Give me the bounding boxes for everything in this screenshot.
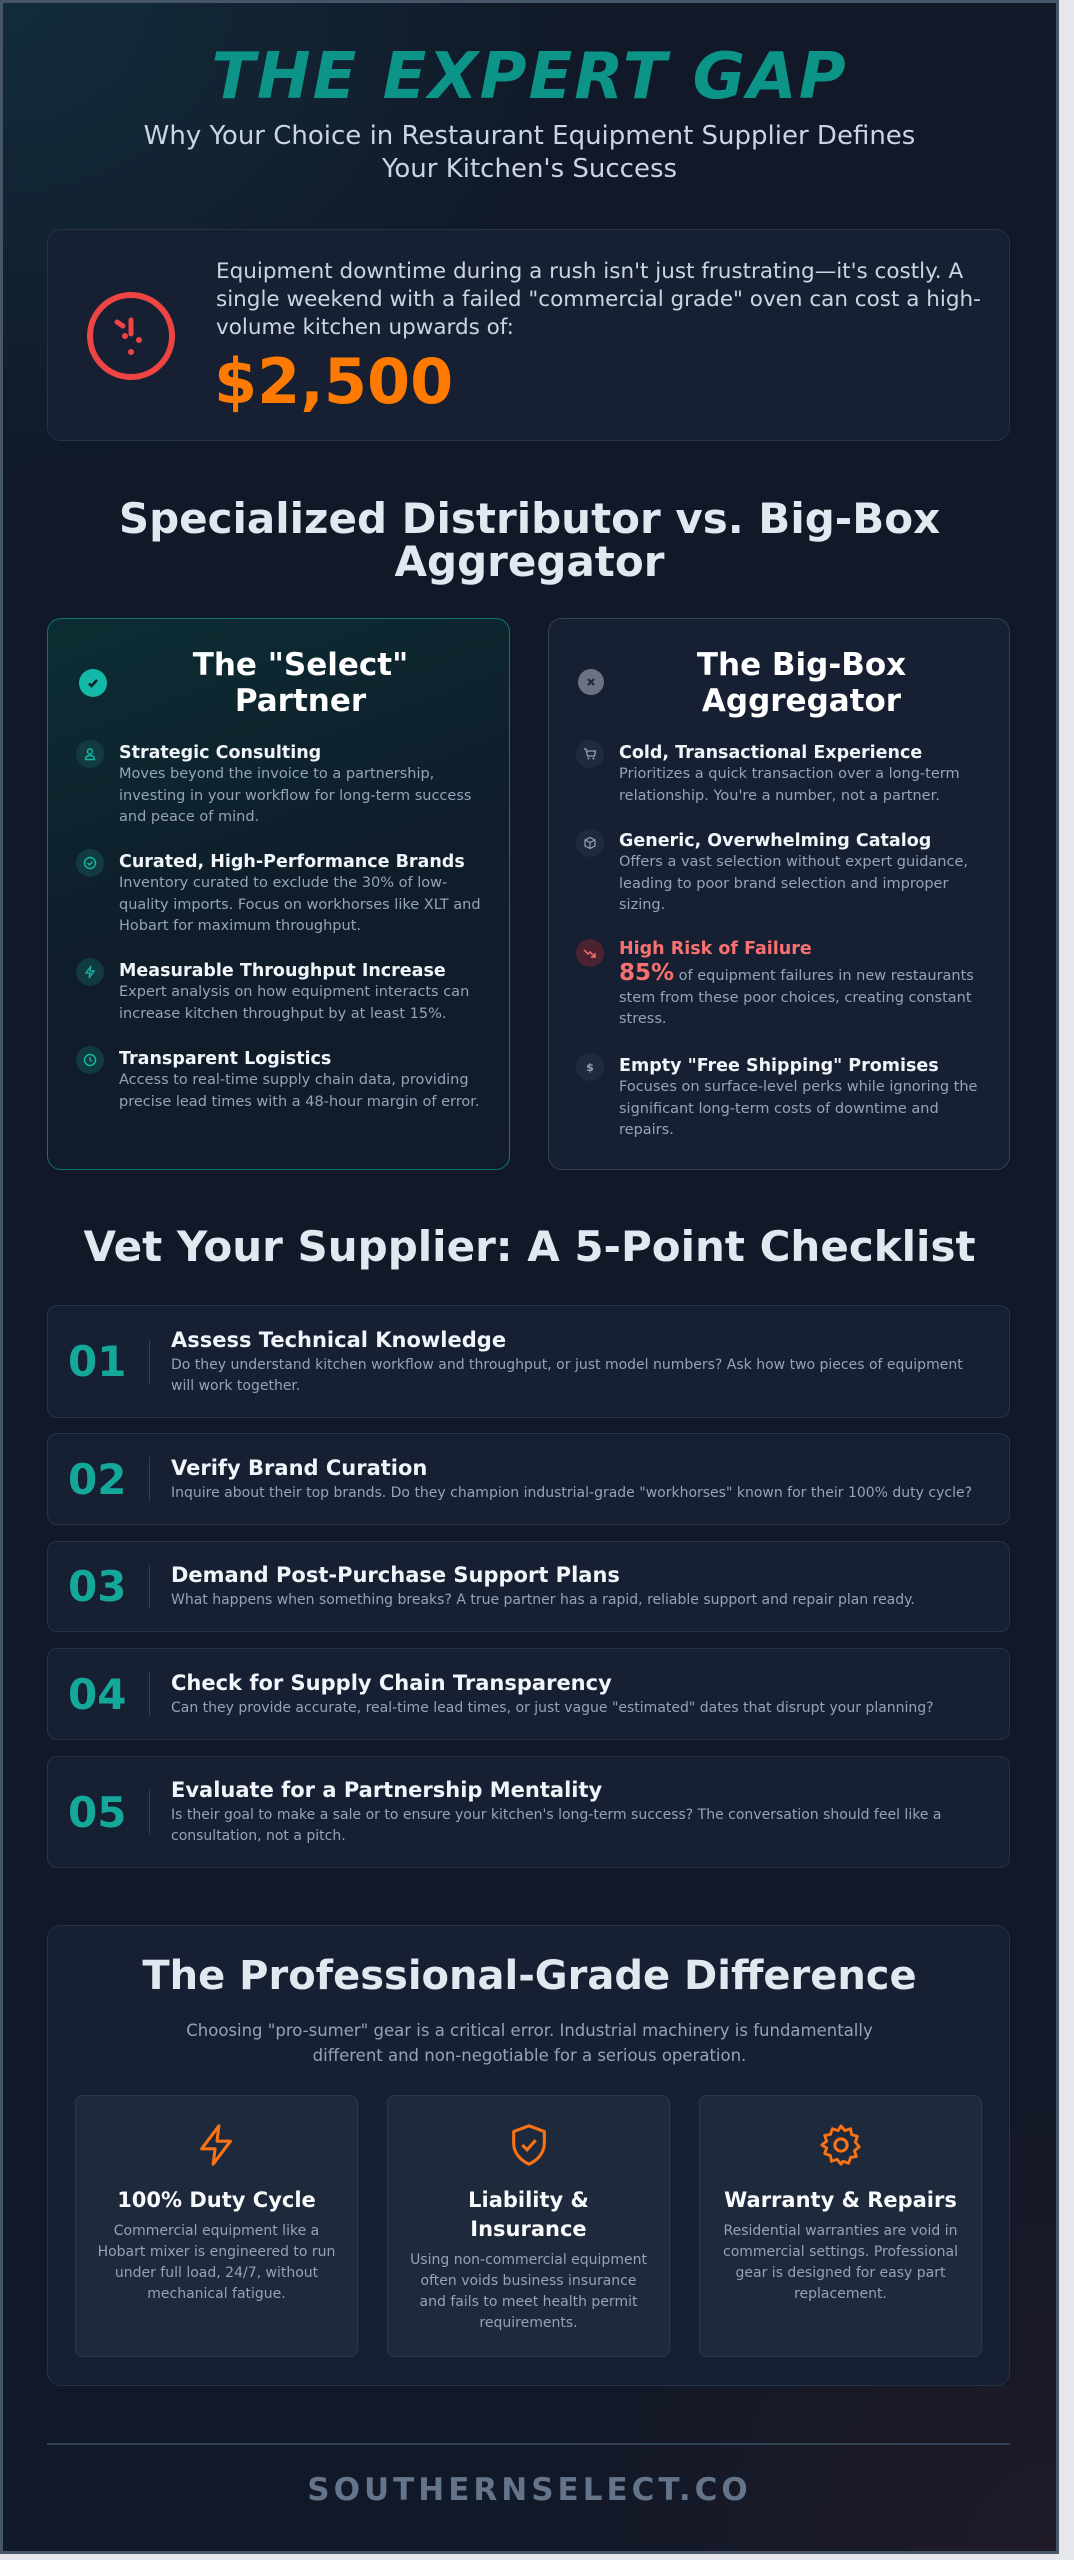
checklist item 03: What happens when something breaks? A true partner has a rapid, reliable support and repair plan ready. (171, 1592, 915, 1608)
checklist item 02: 02 (68, 1454, 126, 1504)
checklist item 05 (47, 1756, 1010, 1868)
checklist item 04: 04 (68, 1670, 126, 1718)
panel heading: Partner (235, 683, 366, 719)
item: free shipping: $ (586, 1060, 594, 1074)
item: throughput: Measurable Throughput Increase (119, 961, 446, 981)
panel heading: The Big-Box (697, 647, 906, 683)
icon: clock alert (87, 292, 175, 380)
checklist item 02 (47, 1433, 1010, 1525)
item: high risk of failure (576, 939, 974, 1027)
item: throughput (76, 958, 469, 1022)
section heading: checklist: Vet Your Supplier: A 5-Point Checklist (83, 1222, 976, 1271)
card: liability: Using non-commercial equipment often voids business insurance and fails to meet health permit requirements. (410, 2252, 647, 2331)
checklist item 01: 01 (68, 1337, 126, 1386)
checklist item 01 (47, 1305, 1010, 1418)
item: generic catalog (576, 829, 968, 913)
item: free shipping: Focuses on surface-level perks while ignoring the significant long-term costs of downtime and repairs. (619, 1079, 977, 1138)
checklist item 04: Can they provide accurate, real-time lead times, or just vague "estimated" dates that disrupt your planning? (171, 1700, 934, 1716)
item: cold experience (576, 740, 960, 804)
item: strategic consulting: Moves beyond the invoice to a partnership, investing in your workflow for long-term success and peace of mind. (119, 766, 471, 825)
checklist item 04 (47, 1648, 1010, 1740)
item: free shipping (576, 1053, 977, 1138)
panel heading (697, 647, 906, 719)
item: generic catalog: Offers a vast selection without expert guidance, leading to poor brand selection and improper sizing. (619, 854, 968, 913)
item: high risk of failure: High Risk of Failure (619, 939, 812, 959)
checklist item 03 (47, 1541, 1010, 1632)
checklist item 04: Check for Supply Chain Transparency (171, 1670, 612, 1694)
subtitle: Why Your Choice in Restaurant Equipment Supplier Defines (144, 121, 915, 151)
item: curated brands: Inventory curated to exclude the 30% of low-quality imports. Focus on workhorses like XLT and Hobart for maximum throughput. (119, 875, 481, 934)
card: warranty: Warranty & Repairs (724, 2188, 957, 2212)
item: throughput: Expert analysis on how equipment interacts can increase kitchen throughput by at least 15%. (119, 984, 469, 1022)
icon: gear (820, 2124, 861, 2166)
section heading: comparison (119, 494, 940, 586)
item: strategic consulting (76, 740, 471, 825)
icon: check (79, 669, 107, 697)
item: strategic consulting: Strategic Consulting (119, 743, 321, 763)
text: professional intro: Choosing "pro-sumer" gear is a critical error. Industrial machinery is fundamentally different and non-negotiable for a serious operation. (186, 2021, 873, 2065)
heading: professional-grade: The Professional-Grade Difference (142, 1953, 917, 1999)
callout: downtime cost (47, 229, 1010, 441)
checklist item 02: Verify Brand Curation (171, 1456, 427, 1480)
item: free shipping: Empty "Free Shipping" Promises (619, 1056, 939, 1076)
item: logistics (76, 1046, 480, 1110)
checklist item 01: Assess Technical Knowledge (171, 1328, 506, 1352)
item: cold experience: Cold, Transactional Experience (619, 743, 922, 763)
checklist item 03: 03 (68, 1562, 126, 1611)
item: cold experience: Prioritizes a quick transaction over a long-term relationship. You're a number, not a partner. (619, 766, 960, 804)
callout text: Equipment downtime during a rush isn't just frustrating—it's costly. A single weekend with a failed "commercial grade" oven can cost a high-volume kitchen upwards of: (216, 259, 981, 340)
card: liability (387, 2095, 670, 2357)
subtitle: Your Kitchen's Success (382, 154, 677, 184)
card: liability: Insurance (470, 2217, 587, 2241)
item: logistics: Transparent Logistics (119, 1049, 331, 1069)
title: THE EXPERT GAP (211, 40, 848, 114)
item: logistics: Access to real-time supply chain data, providing precise lead times with a 48-hour margin of error. (119, 1072, 480, 1110)
card: duty cycle: 100% Duty Cycle (117, 2188, 316, 2212)
card: duty cycle: Commercial equipment like a Hobart mixer is engineered to run under full load, 24/7, without mechanical fatigue. (98, 2223, 335, 2302)
item: curated brands (76, 849, 481, 934)
checklist item 02: Inquire about their top brands. Do they champion industrial-grade "workhorses" known for their 100% duty cycle? (171, 1484, 972, 1500)
item: generic catalog: Generic, Overwhelming Catalog (619, 831, 931, 851)
checklist item 05: Evaluate for a Partnership Mentality (171, 1778, 602, 1802)
panel: professional-grade difference (47, 1925, 1010, 2386)
checklist item 05: Is their goal to make a sale or to ensure your kitchen's long-term success? The conversation should feel like a consultation, not a pitch. (171, 1807, 941, 1844)
card: liability: Liability & (468, 2188, 589, 2212)
footer brand: SOUTHERNSELECT.CO (307, 2472, 752, 2508)
panel heading: Aggregator (702, 683, 901, 719)
section heading: comparison: Specialized Distributor vs. Big-Box (119, 494, 940, 543)
big number: $2,500 (214, 345, 453, 418)
item: high risk of failure: 85% of equipment failures in new restaurants stem from these poor choices, creating constant stress. (619, 960, 974, 1027)
section heading: comparison: Aggregator (395, 537, 664, 586)
icon: bolt (200, 2124, 232, 2166)
panel: big-box aggregator (548, 618, 1010, 1170)
checklist item 05: 05 (68, 1788, 126, 1836)
panel heading: The "Select" (193, 647, 408, 683)
panel heading (192, 647, 408, 719)
card: duty cycle (75, 2095, 358, 2357)
checklist item 03: Demand Post-Purchase Support Plans (171, 1563, 620, 1587)
card: warranty: Residential warranties are void in commercial settings. Professional gear is designed for easy part replacement. (723, 2223, 958, 2302)
item: curated brands: Curated, High-Performance Brands (119, 852, 465, 872)
card: warranty (699, 2095, 982, 2357)
checklist item 01: Do they understand kitchen workflow and throughput, or just model numbers? Ask how two pieces of equipment will work together. (171, 1356, 963, 1394)
icon: shield (512, 2124, 546, 2166)
icon: x (578, 669, 604, 695)
panel: select partner (47, 618, 510, 1170)
subtitle (144, 121, 915, 184)
